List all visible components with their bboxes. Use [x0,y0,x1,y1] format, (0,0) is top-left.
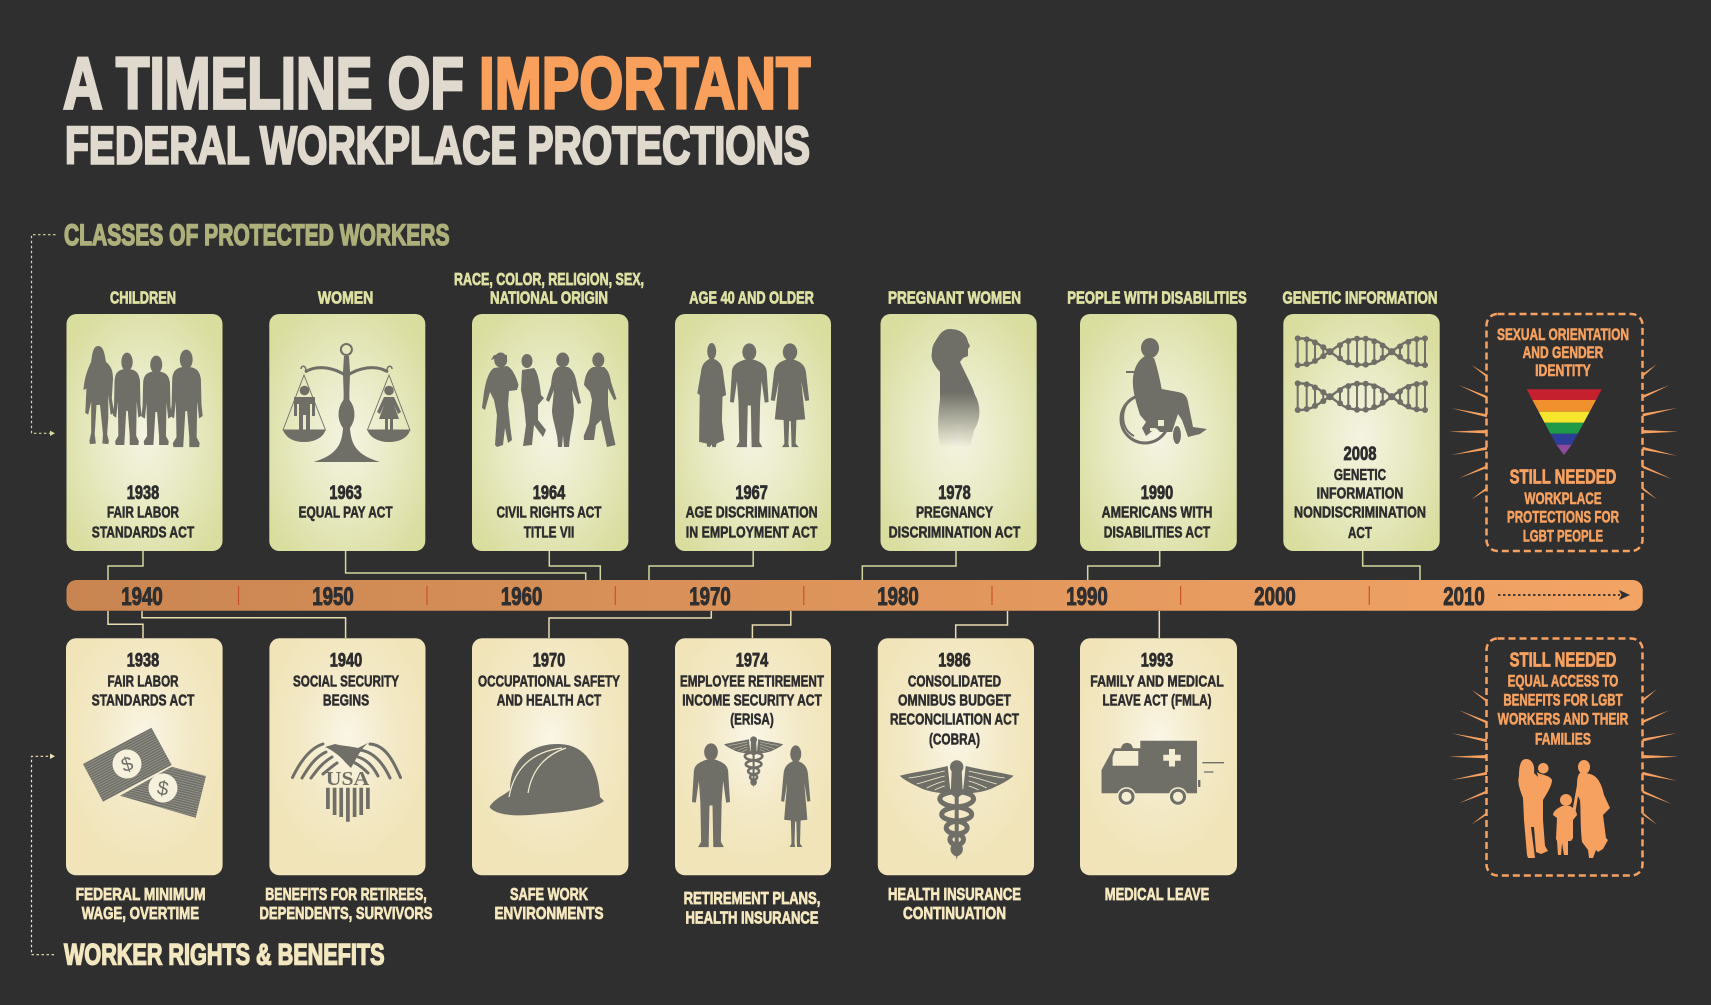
act: 1978 pregnancy discrimination act: DISCRIMINATION ACT [889,525,1021,542]
label: pregnant women: PREGNANT WOMEN [888,287,1021,307]
icon: children silhouettes [84,346,203,447]
act: 1938 fair labor standards act: FAIR LABOR [107,505,179,522]
act: 1940 social security begins [293,650,399,709]
act: 1938 fair labor standards act: FAIR LABOR [108,673,179,690]
act: 1938 fair labor standards act: STANDARDS ACT [92,525,194,542]
decade labels: 1950 [312,584,354,611]
act: 1963 equal pay act: EQUAL PAY ACT [299,505,393,522]
icon: dollar bills: $ [119,753,136,777]
act: 1970 occupational safety and health act: 1970 [533,650,565,672]
panel: social security [260,638,432,923]
icon: walking group [482,352,616,447]
icon: dollar bills [83,728,206,818]
card [66,638,223,875]
panel: people with disabilities [1067,287,1247,551]
act: 1986 cobra: 1986 [938,650,971,672]
icon: hard hat [490,744,604,815]
act: 1993 fmla: 1993 [1141,650,1173,672]
act: 1938 fair labor standards act: 1938 [127,482,159,504]
callout: still needed workplace protections: WORKPLACE [1524,489,1602,508]
card [472,638,628,875]
caption: CONTINUATION [903,903,1006,923]
decade labels [121,584,1485,611]
icon: ambulance [1102,741,1224,806]
decade labels: 1970 [689,584,731,611]
act: 1974 erisa: INCOME SECURITY ACT [682,692,822,709]
act: 2008 genetic information nondiscrimination act: NONDISCRIMINATION [1294,504,1426,522]
callout: still needed equal access: STILL NEEDED [1510,650,1616,672]
caption: WAGE, OVERTIME [82,903,199,923]
card [269,314,425,551]
caption: HEALTH INSURANCE [686,907,818,927]
rays [1449,689,1678,824]
label: age 40 and older: AGE 40 AND OLDER [689,287,814,307]
act: 1938 fair labor standards act: STANDARDS ACT [92,692,195,709]
label: women: WOMEN [318,287,373,307]
decade ticks [238,586,1369,605]
label: children: CHILDREN [110,287,176,307]
callout: still needed equal access: EQUAL ACCESS TO [1508,671,1618,690]
act: 1986 cobra: RECONCILIATION ACT [890,711,1019,728]
panel: health insurance continuation [878,638,1034,923]
act: 1986 cobra: CONSOLIDATED [908,673,1001,690]
act: 2008 genetic information nondiscrimination act [1294,443,1426,542]
label: race, color, religion, sex, national origin: RACE, COLOR, RELIGION, SEX, [454,269,644,289]
icon: scales of justice [283,344,410,462]
panel: still needed, workplace protections [1449,314,1678,551]
callout: still needed equal access: FAMILIES [1535,729,1591,748]
act: 1993 fmla: FAMILY AND MEDICAL [1090,673,1224,690]
act: 1940 social security begins: BEGINS [323,692,369,709]
label: race, color, religion, sex, national origin: NATIONAL ORIGIN [490,287,608,307]
arrow: timeline continues [1498,590,1630,600]
panel: genetic information [1282,287,1440,551]
act: 1940 social security begins: 1940 [330,650,362,672]
card [269,638,426,875]
title: FEDERAL WORKPLACE PROTECTIONS [65,116,810,176]
caption [494,884,604,923]
act: 1967 age discrimination in employment act: AGE DISCRIMINATION [686,505,818,522]
act: 1967 age discrimination in employment act [686,482,818,542]
act: 1993 fmla [1090,650,1224,709]
caption: FEDERAL MINIMUM [76,884,206,904]
decade labels: 1960 [501,584,542,611]
icon: usa eagle shield [292,743,400,822]
panel: still needed, equal benefits [1449,638,1678,876]
act: 1974 erisa: 1974 [736,650,768,672]
panel: occupational safety [472,638,628,923]
card [878,638,1034,875]
act: 2008 genetic information nondiscrimination act: ACT [1348,525,1372,542]
panel: retirement plans [675,638,831,927]
act: 1990 americans with disabilities act: AMERICANS WITH [1102,505,1212,522]
heading: classes of protected workers: CLASSES OF PROTECTED WORKERS [64,219,450,252]
act: 1974 erisa [680,650,824,728]
panel: children [66,287,222,551]
caption: MEDICAL LEAVE [1105,884,1209,904]
card [472,314,628,551]
dashed box [1486,314,1642,551]
icon: dollar bills: $ [155,777,170,801]
card [66,314,222,551]
bar [66,580,1643,611]
caption [888,884,1021,923]
icon: family silhouette [1518,759,1610,858]
card [675,314,831,551]
act: 1938 fair labor standards act: 1938 [127,650,159,672]
act: 1978 pregnancy discrimination act [889,482,1021,542]
act: 1967 age discrimination in employment act: IN EMPLOYMENT ACT [686,525,818,542]
act: 1970 occupational safety and health act [478,650,620,709]
act: 2008 genetic information nondiscrimination act: 2008 [1344,443,1377,465]
card [880,314,1037,551]
caption [76,884,206,923]
act: 1974 erisa: (ERISA) [730,711,774,728]
card [1080,638,1237,875]
panel: women [269,287,425,551]
act: 1964 civil rights act title vii [496,482,602,542]
act: 1986 cobra [890,650,1019,748]
act: 1967 age discrimination in employment act: 1967 [735,482,768,504]
panel: race, color, religion, sex, national origin [454,269,644,551]
label: sexual orientation and gender identity [1497,325,1629,380]
act: 1963 equal pay act [299,482,393,522]
callout: still needed equal access: WORKERS AND THEIR [1498,709,1628,728]
caption [684,888,820,927]
caption [260,884,432,923]
icon: caduceus [900,760,1014,860]
act: 1990 americans with disabilities act: DISABILITIES ACT [1104,525,1210,542]
act: 2008 genetic information nondiscrimination act: GENETIC [1334,467,1386,484]
title [63,44,810,176]
act: 1978 pregnancy discrimination act: PREGNANCY [916,505,993,522]
icon: dna strands [1295,335,1428,413]
panel: medical leave [1080,638,1237,904]
panel: federal minimum wage [66,638,223,923]
label: race, color, religion, sex, national origin [454,269,644,307]
act: 1964 civil rights act title vii: CIVIL RIGHTS ACT [496,505,602,522]
act: 1970 occupational safety and health act: AND HEALTH ACT [497,692,601,709]
icon: retired couple and caduceus [692,736,810,847]
decade labels: 1940 [121,584,163,611]
card [675,638,831,875]
act: 1978 pregnancy discrimination act: 1978 [938,482,971,504]
label: people with disabilities: PEOPLE WITH DISABILITIES [1067,287,1247,307]
arrow: classes bracket [32,235,56,436]
label: genetic information: GENETIC INFORMATION [1282,287,1438,307]
title: A TIMELINE OF [63,44,464,124]
callout: still needed workplace protections: STILL NEEDED [1510,466,1616,488]
act: 1938 fair labor standards act [92,482,194,542]
act: 1993 fmla: LEAVE ACT (FMLA) [1102,692,1212,709]
icon: wheelchair user [1121,338,1207,444]
act: 1964 civil rights act title vii: 1964 [533,482,565,504]
caption: HEALTH INSURANCE [888,884,1021,904]
act: 1990 americans with disabilities act [1102,482,1212,542]
act: 1970 occupational safety and health act: OCCUPATIONAL SAFETY [478,673,620,690]
label: sexual orientation and gender identity: SEXUAL ORIENTATION [1497,325,1629,344]
caption: ENVIRONMENTS [494,903,604,923]
decade labels: 2010 [1443,584,1485,611]
callout: still needed equal access: BENEFITS FOR LGBT [1503,690,1623,709]
icon: pregnant woman silhouette [932,329,979,447]
callout: still needed workplace protections: PROTECTIONS FOR [1507,508,1619,526]
act: 1938 fair labor standards act [92,650,195,709]
act: 1964 civil rights act title vii: TITLE VII [524,525,574,542]
decade labels: 2000 [1254,584,1296,611]
act: 1986 cobra: (COBRA) [929,731,980,748]
panel: pregnant women [880,287,1037,551]
label: sexual orientation and gender identity: AND GENDER [1523,343,1603,362]
caption: DEPENDENTS, SURVIVORS [260,903,432,923]
decade labels: 1990 [1066,584,1108,611]
act: 2008 genetic information nondiscrimination act: INFORMATION [1317,486,1403,502]
caption: RETIREMENT PLANS, [684,888,820,908]
act: 1974 erisa: EMPLOYEE RETIREMENT [680,673,824,690]
card [1283,314,1440,551]
callout: still needed workplace protections [1507,466,1619,545]
panel: age 40 and older [675,287,831,551]
card [1080,314,1237,551]
rays [1449,364,1678,499]
act: 1990 americans with disabilities act: 1990 [1141,482,1173,504]
connectors: timeline to lower cards [108,611,1159,638]
connectors: upper cards to timeline [108,551,1420,580]
caption: BENEFITS FOR RETIREES, [265,884,427,904]
callout: still needed workplace protections: LGBT PEOPLE [1523,526,1603,545]
title: IMPORTANT [479,44,810,124]
heading: worker rights and benefits: WORKER RIGHTS & BENEFITS [64,939,384,972]
icon: older adults [697,343,809,447]
label: sexual orientation and gender identity: IDENTITY [1535,361,1591,380]
dashed box [1486,638,1642,876]
act: 1986 cobra: OMNIBUS BUDGET [898,692,1011,709]
caption: SAFE WORK [510,884,588,904]
decade labels: 1980 [877,584,919,611]
timeline bar [66,580,1643,611]
icon: usa eagle shield: USA [326,768,370,790]
icon: rainbow triangle [1527,389,1602,455]
callout: still needed equal access [1498,650,1628,748]
arrow: worker rights bracket [32,754,55,955]
act: 1963 equal pay act: 1963 [329,482,362,504]
act: 1940 social security begins: SOCIAL SECURITY [293,673,399,690]
